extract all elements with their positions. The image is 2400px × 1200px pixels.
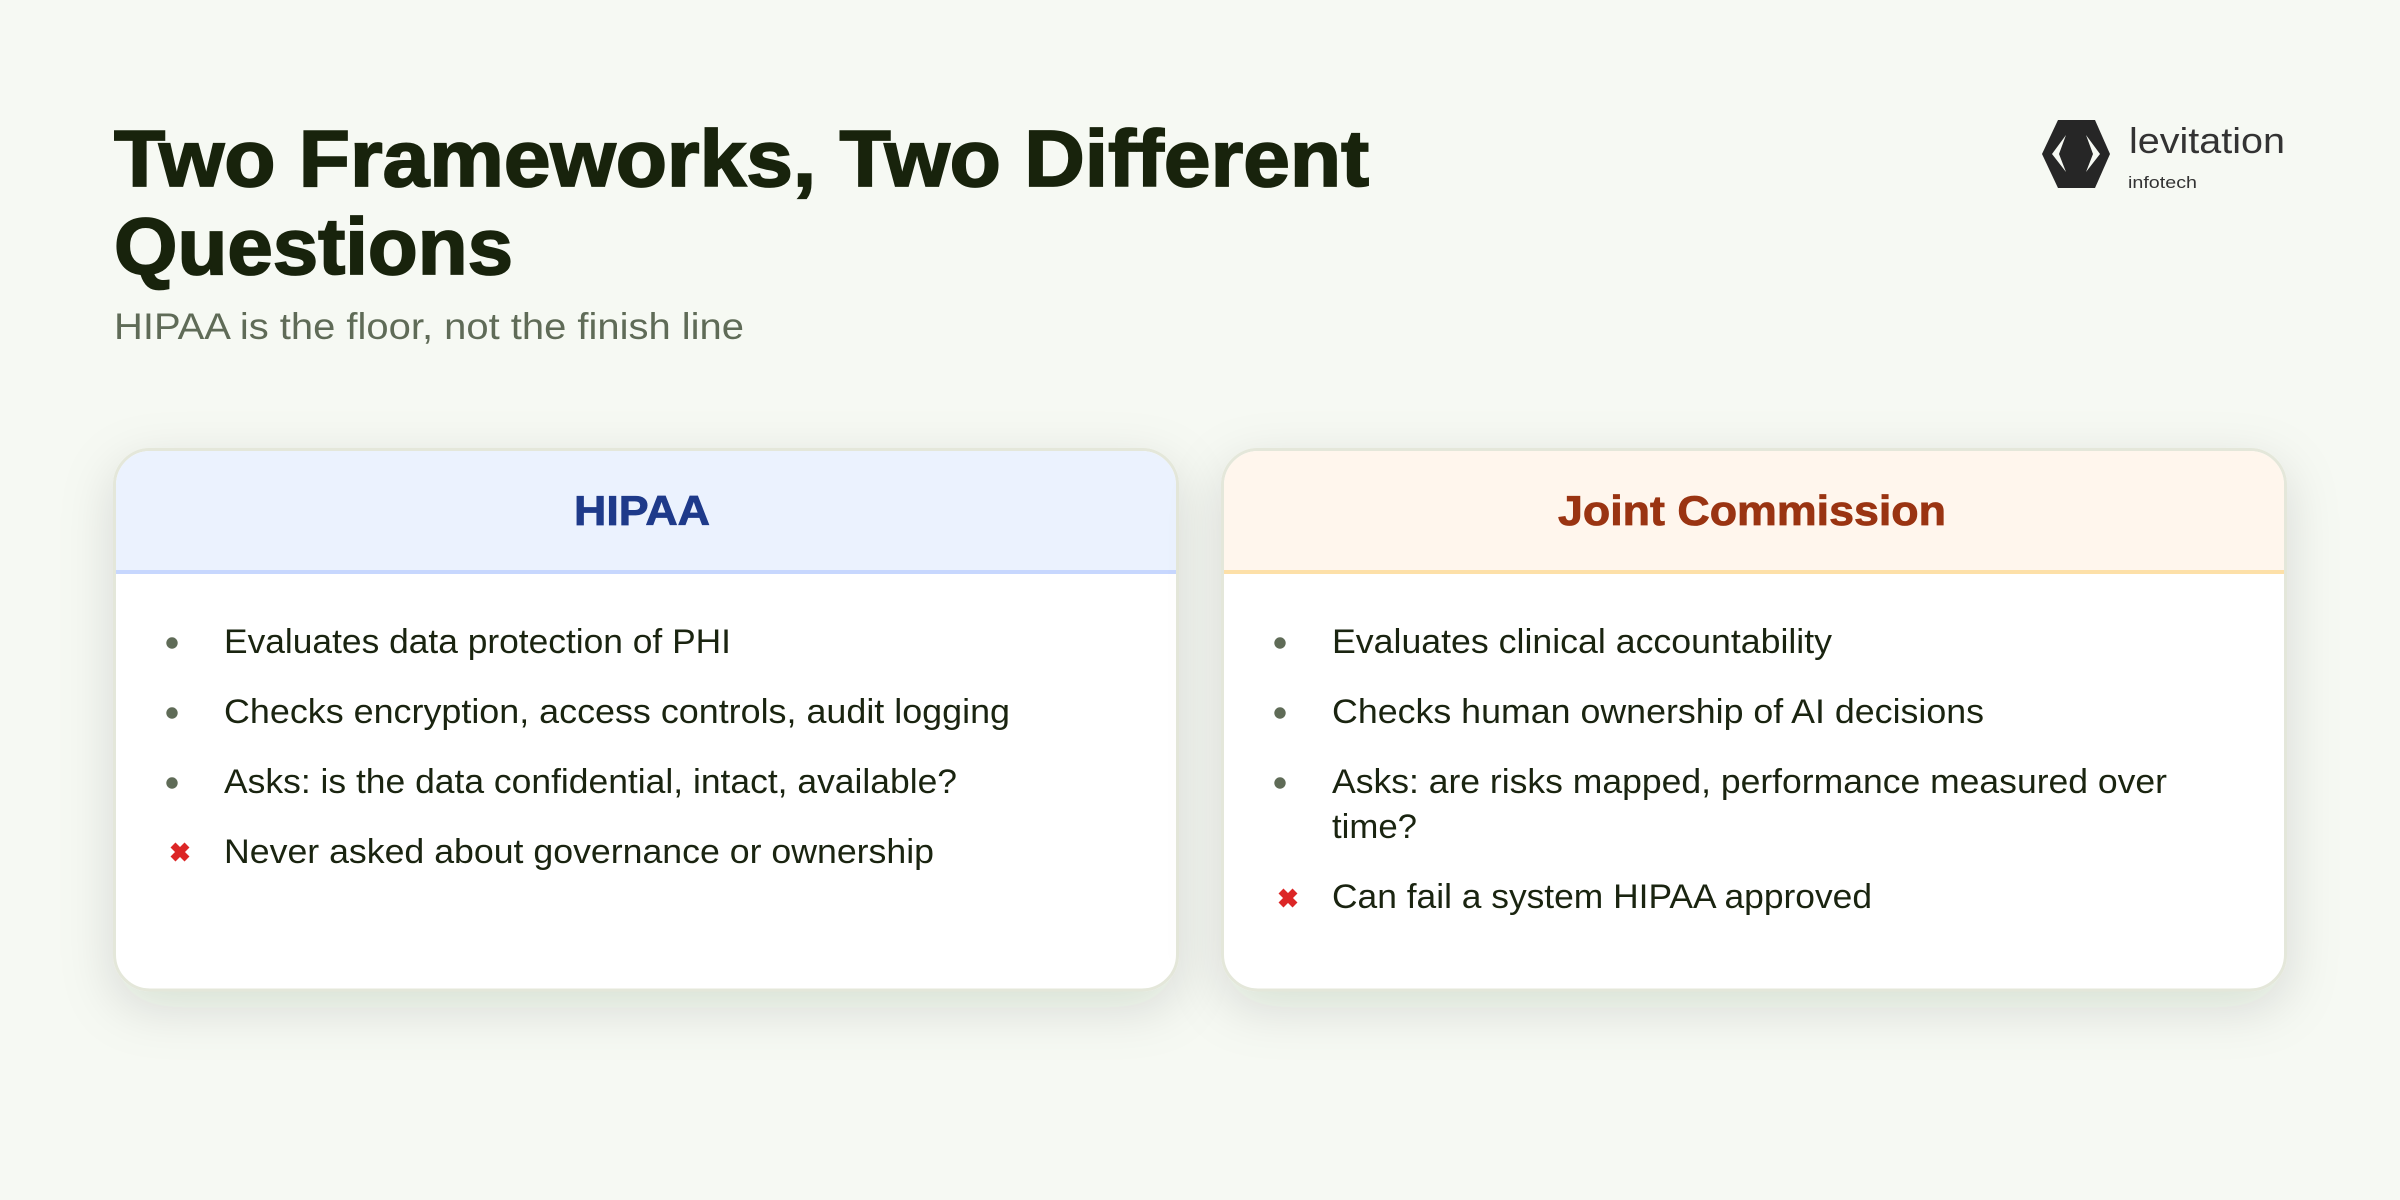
subtitle: HIPAA is the floor, not the finish line [114,306,744,347]
panel: Joint Commission [1222,450,2286,990]
bullet item 3: Asks: are risks mapped, performance measured over [1332,763,2167,801]
bullet item 3 [1274,763,2167,846]
bullet item 2: Checks human ownership of AI decisions [1332,693,1984,731]
title: Questions [114,202,513,291]
icon: hexagon with chevrons [2042,120,2110,188]
title: Two Frameworks, Two Different [114,114,1369,203]
cross item 4: Can fail a system HIPAA approved [1332,878,1872,916]
bullet item 1: Evaluates data protection of PHI [224,623,731,661]
bullet item 1: Evaluates clinical accountability [1332,623,1832,661]
bullet item 3: Asks: is the data confidential, intact, available? [224,763,957,801]
panel header: Joint Commission [1224,451,2284,574]
panel header: HIPAA: HIPAA [574,487,710,534]
panel header: Joint Commission: Joint Commission [1558,487,1946,534]
bullet item 2: Checks encryption, access controls, audit logging [224,693,1010,731]
panel header: HIPAA [116,451,1176,574]
logo wordmark: levitation [2129,120,2285,161]
bullet item 3: time? [1332,808,1417,846]
title [114,114,1369,291]
logo tagline: infotech [2128,173,2197,192]
list: Joint Commission points [1274,623,2167,916]
panel: HIPAA [114,450,1178,990]
cross item 4: Never asked about governance or ownership [224,833,934,871]
logo: levitation infotech [2042,120,2285,192]
list: HIPAA points [166,623,1010,871]
